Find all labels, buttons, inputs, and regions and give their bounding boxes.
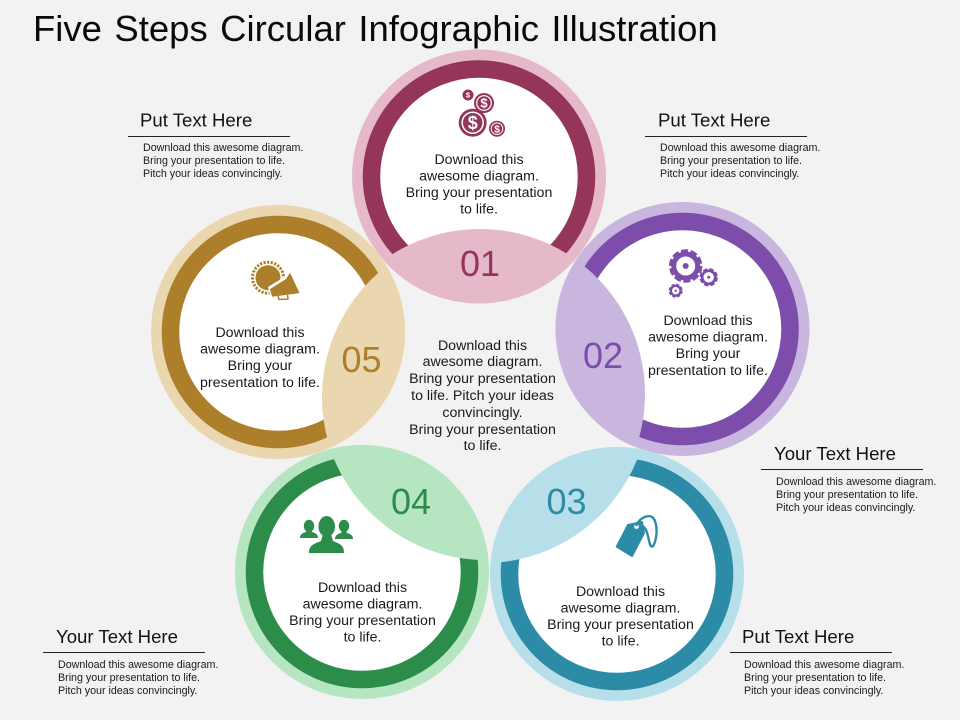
callout: bottom left: Bring your presentation to life. <box>58 672 200 684</box>
number tab 04 <box>331 445 488 560</box>
number tab 03 <box>490 447 641 562</box>
callout: top left: Bring your presentation to life. <box>143 155 285 167</box>
number 05: 05 <box>341 339 382 380</box>
ring 04 <box>254 464 470 680</box>
text 01 <box>406 152 552 218</box>
text 05: Bring your <box>228 358 293 374</box>
callout: bottom left: Pitch your ideas convincingly. <box>58 685 197 697</box>
callout: top right: Pitch your ideas convincingly. <box>660 168 799 180</box>
ring 03 <box>510 466 724 682</box>
number tab 01 <box>384 229 575 304</box>
text 02: presentation to life. <box>648 363 768 379</box>
title: Five Steps Circular Infographic Illustration <box>33 8 718 49</box>
centre text <box>409 338 556 454</box>
ring 01 <box>372 69 586 284</box>
text 03: Download this <box>576 584 665 600</box>
number 03: 03 <box>546 481 587 522</box>
callout: bottom left: Download this awesome diagram. <box>58 659 218 671</box>
ring 02 <box>575 222 790 436</box>
panel: step 05 <box>151 205 405 459</box>
callout: top right: Bring your presentation to life. <box>660 155 802 167</box>
panel: step 01 <box>352 50 606 304</box>
number 01: 01 <box>460 243 500 284</box>
text 05: presentation to life. <box>200 375 320 391</box>
callout: top left: Download this awesome diagram. <box>143 142 303 154</box>
outer disc 05 <box>151 205 405 459</box>
text 03: to life. <box>602 634 639 650</box>
callout: bottom right: Put Text Here <box>742 626 854 647</box>
callout: middle right: Pitch your ideas convincingly. <box>776 502 915 514</box>
centre text: Bring your presentation <box>409 371 556 387</box>
number tab 02 <box>556 260 645 447</box>
icon: coins: $ <box>468 113 478 133</box>
callout: bottom right: Bring your presentation to life. <box>744 672 886 684</box>
text 05: awesome diagram. <box>200 342 320 358</box>
callout: bottom left <box>43 626 218 697</box>
number tab 05 <box>322 266 405 448</box>
text 03 <box>547 584 694 650</box>
callout: middle right: Bring your presentation to life. <box>776 489 918 501</box>
panel: step 04 <box>235 445 489 699</box>
text 04: Download this <box>318 580 407 596</box>
callout: middle right <box>761 443 936 514</box>
text 04 <box>289 580 436 646</box>
callout: middle right: Your Text Here <box>774 443 896 464</box>
callout: bottom left: Your Text Here <box>56 626 178 647</box>
text 05 <box>200 325 320 391</box>
callout: top left <box>128 110 303 180</box>
callout: bottom right: Pitch your ideas convincingly. <box>744 685 883 697</box>
callout: bottom right <box>730 626 904 697</box>
callout: middle right: Download this awesome diagram. <box>776 476 936 488</box>
panel: step 02 <box>556 202 810 456</box>
text 04: Bring your presentation <box>289 613 436 629</box>
callout: top left: Put Text Here <box>140 110 252 130</box>
text 04: to life. <box>344 630 381 646</box>
outer disc 04 <box>235 445 489 699</box>
text 02: Bring your <box>676 346 741 362</box>
centre text: convincingly. <box>442 405 523 421</box>
text 05: Download this <box>215 325 305 341</box>
icon: price tag <box>617 516 657 556</box>
centre text: awesome diagram. <box>423 354 542 370</box>
icon: coins: $ <box>494 124 500 136</box>
icon: people <box>300 516 353 553</box>
callout: top left: Pitch your ideas convincingly. <box>143 168 282 180</box>
centre text: Download this <box>438 338 527 354</box>
text 02: Download this <box>663 313 753 329</box>
outer disc 01 <box>352 50 606 304</box>
icon: badge and megaphone <box>252 262 302 300</box>
number 02: 02 <box>583 335 623 376</box>
text 04: awesome diagram. <box>303 596 422 612</box>
ring 05 <box>170 224 386 440</box>
icon: gears <box>670 251 717 297</box>
callout: bottom right: Download this awesome diagram. <box>744 659 904 671</box>
icon: coins: $ <box>466 91 471 100</box>
text 01: Bring your presentation <box>406 185 552 201</box>
text 01: Download this <box>434 152 524 168</box>
callout: top right <box>645 110 820 180</box>
callout: top right: Download this awesome diagram. <box>660 142 820 154</box>
text 02 <box>648 313 768 379</box>
text 03: Bring your presentation <box>547 617 694 633</box>
centre text: to life. Pitch your ideas <box>411 388 554 404</box>
text 01: to life. <box>460 202 498 218</box>
text 02: awesome diagram. <box>648 330 768 346</box>
icon: coins <box>459 90 505 137</box>
text 03: awesome diagram. <box>561 600 680 616</box>
outer disc 03 <box>490 447 744 701</box>
centre text: Bring your presentation <box>409 422 556 438</box>
text 01: awesome diagram. <box>419 168 539 184</box>
panel: step 03 <box>490 447 744 701</box>
number 04: 04 <box>391 481 431 522</box>
outer disc 02 <box>556 202 810 456</box>
centre text: to life. <box>464 438 501 454</box>
icon: coins: $ <box>480 96 488 110</box>
callout: top right: Put Text Here <box>658 110 770 130</box>
